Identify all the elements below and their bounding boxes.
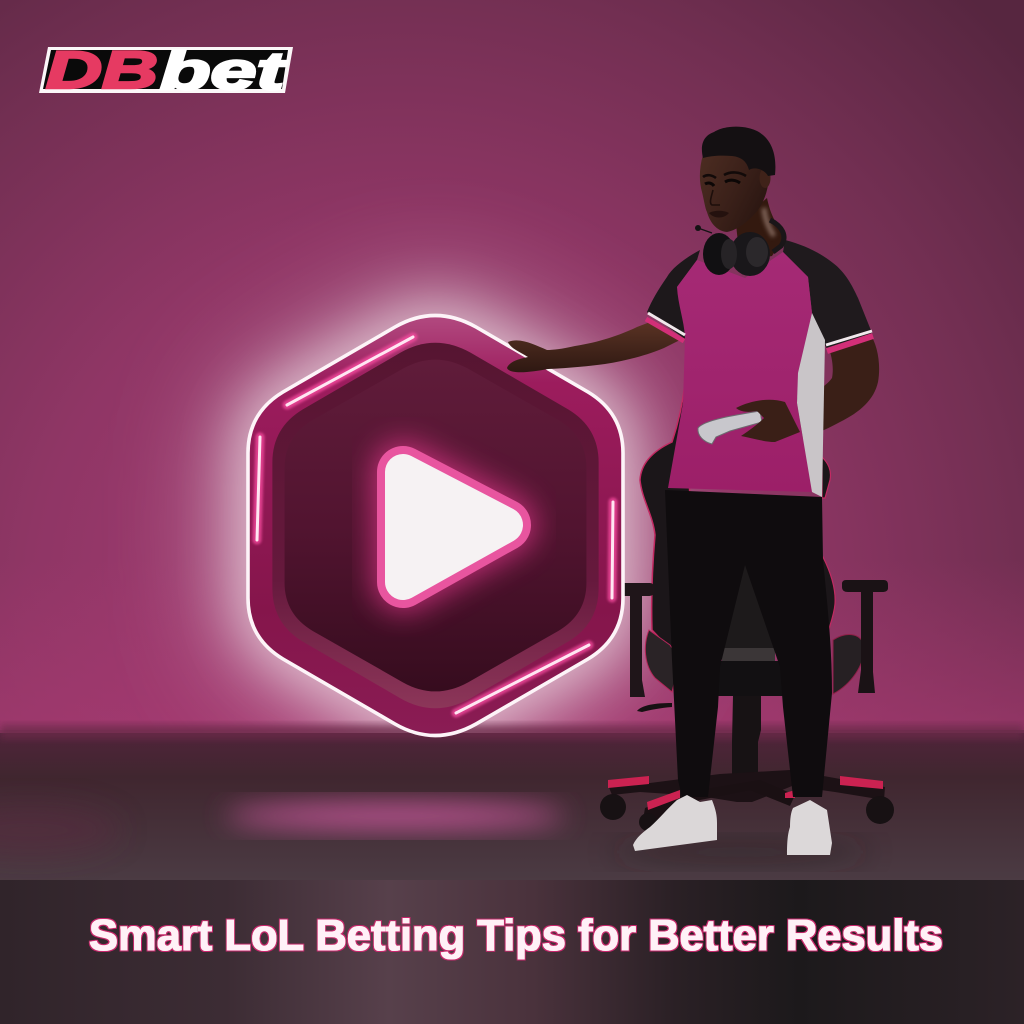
game controller xyxy=(698,411,762,444)
head xyxy=(700,150,769,232)
right shoe xyxy=(787,800,832,855)
hexagon play button xyxy=(248,316,623,736)
headset xyxy=(695,220,784,276)
ear xyxy=(760,168,770,188)
shirt white side panel xyxy=(797,313,825,497)
chair backrest left side xyxy=(640,383,690,660)
logo xyxy=(39,41,293,101)
background wall xyxy=(0,0,1024,740)
logo text DB: DB xyxy=(46,41,158,100)
hair xyxy=(702,127,775,176)
hexagon middle bevel xyxy=(272,343,599,708)
chair xyxy=(600,383,894,831)
triangle glow xyxy=(403,472,505,582)
triangle pink border xyxy=(403,472,505,582)
chair base xyxy=(608,770,885,802)
man xyxy=(507,127,879,855)
title: Smart LoL Betting Tips for Better Results xyxy=(89,911,943,960)
chair column xyxy=(732,696,761,785)
neck xyxy=(736,198,785,262)
chair seat right bolster xyxy=(833,635,864,694)
chair wheels xyxy=(600,794,894,831)
triangle white xyxy=(403,472,505,582)
hexagon core xyxy=(285,360,586,691)
eyes and brows xyxy=(703,172,746,205)
left armrest xyxy=(620,583,654,697)
neon light strips xyxy=(257,337,613,713)
left shoe xyxy=(633,795,717,851)
hexagon back glow xyxy=(248,316,623,736)
chair seat left bolster xyxy=(645,630,680,692)
hand over controller xyxy=(736,400,800,442)
seat lever xyxy=(637,703,672,712)
right armrest xyxy=(842,580,888,693)
shirt body xyxy=(668,252,812,492)
lips xyxy=(709,211,729,218)
bottom banner xyxy=(0,880,1024,1024)
shirt right sleeve xyxy=(783,240,872,349)
hexagon white outline xyxy=(248,316,623,736)
left arm and hand xyxy=(507,322,684,372)
chair pink tips xyxy=(608,776,883,810)
shirt left sleeve xyxy=(647,250,700,339)
chair backrest right side xyxy=(820,457,835,640)
pants xyxy=(665,490,832,797)
logo text bet: bet xyxy=(160,42,288,101)
chair seat centre xyxy=(722,648,775,662)
chair backrest centre xyxy=(722,560,776,650)
floor xyxy=(0,725,1024,880)
right arm xyxy=(770,332,879,442)
shirt cuffs xyxy=(646,313,873,351)
